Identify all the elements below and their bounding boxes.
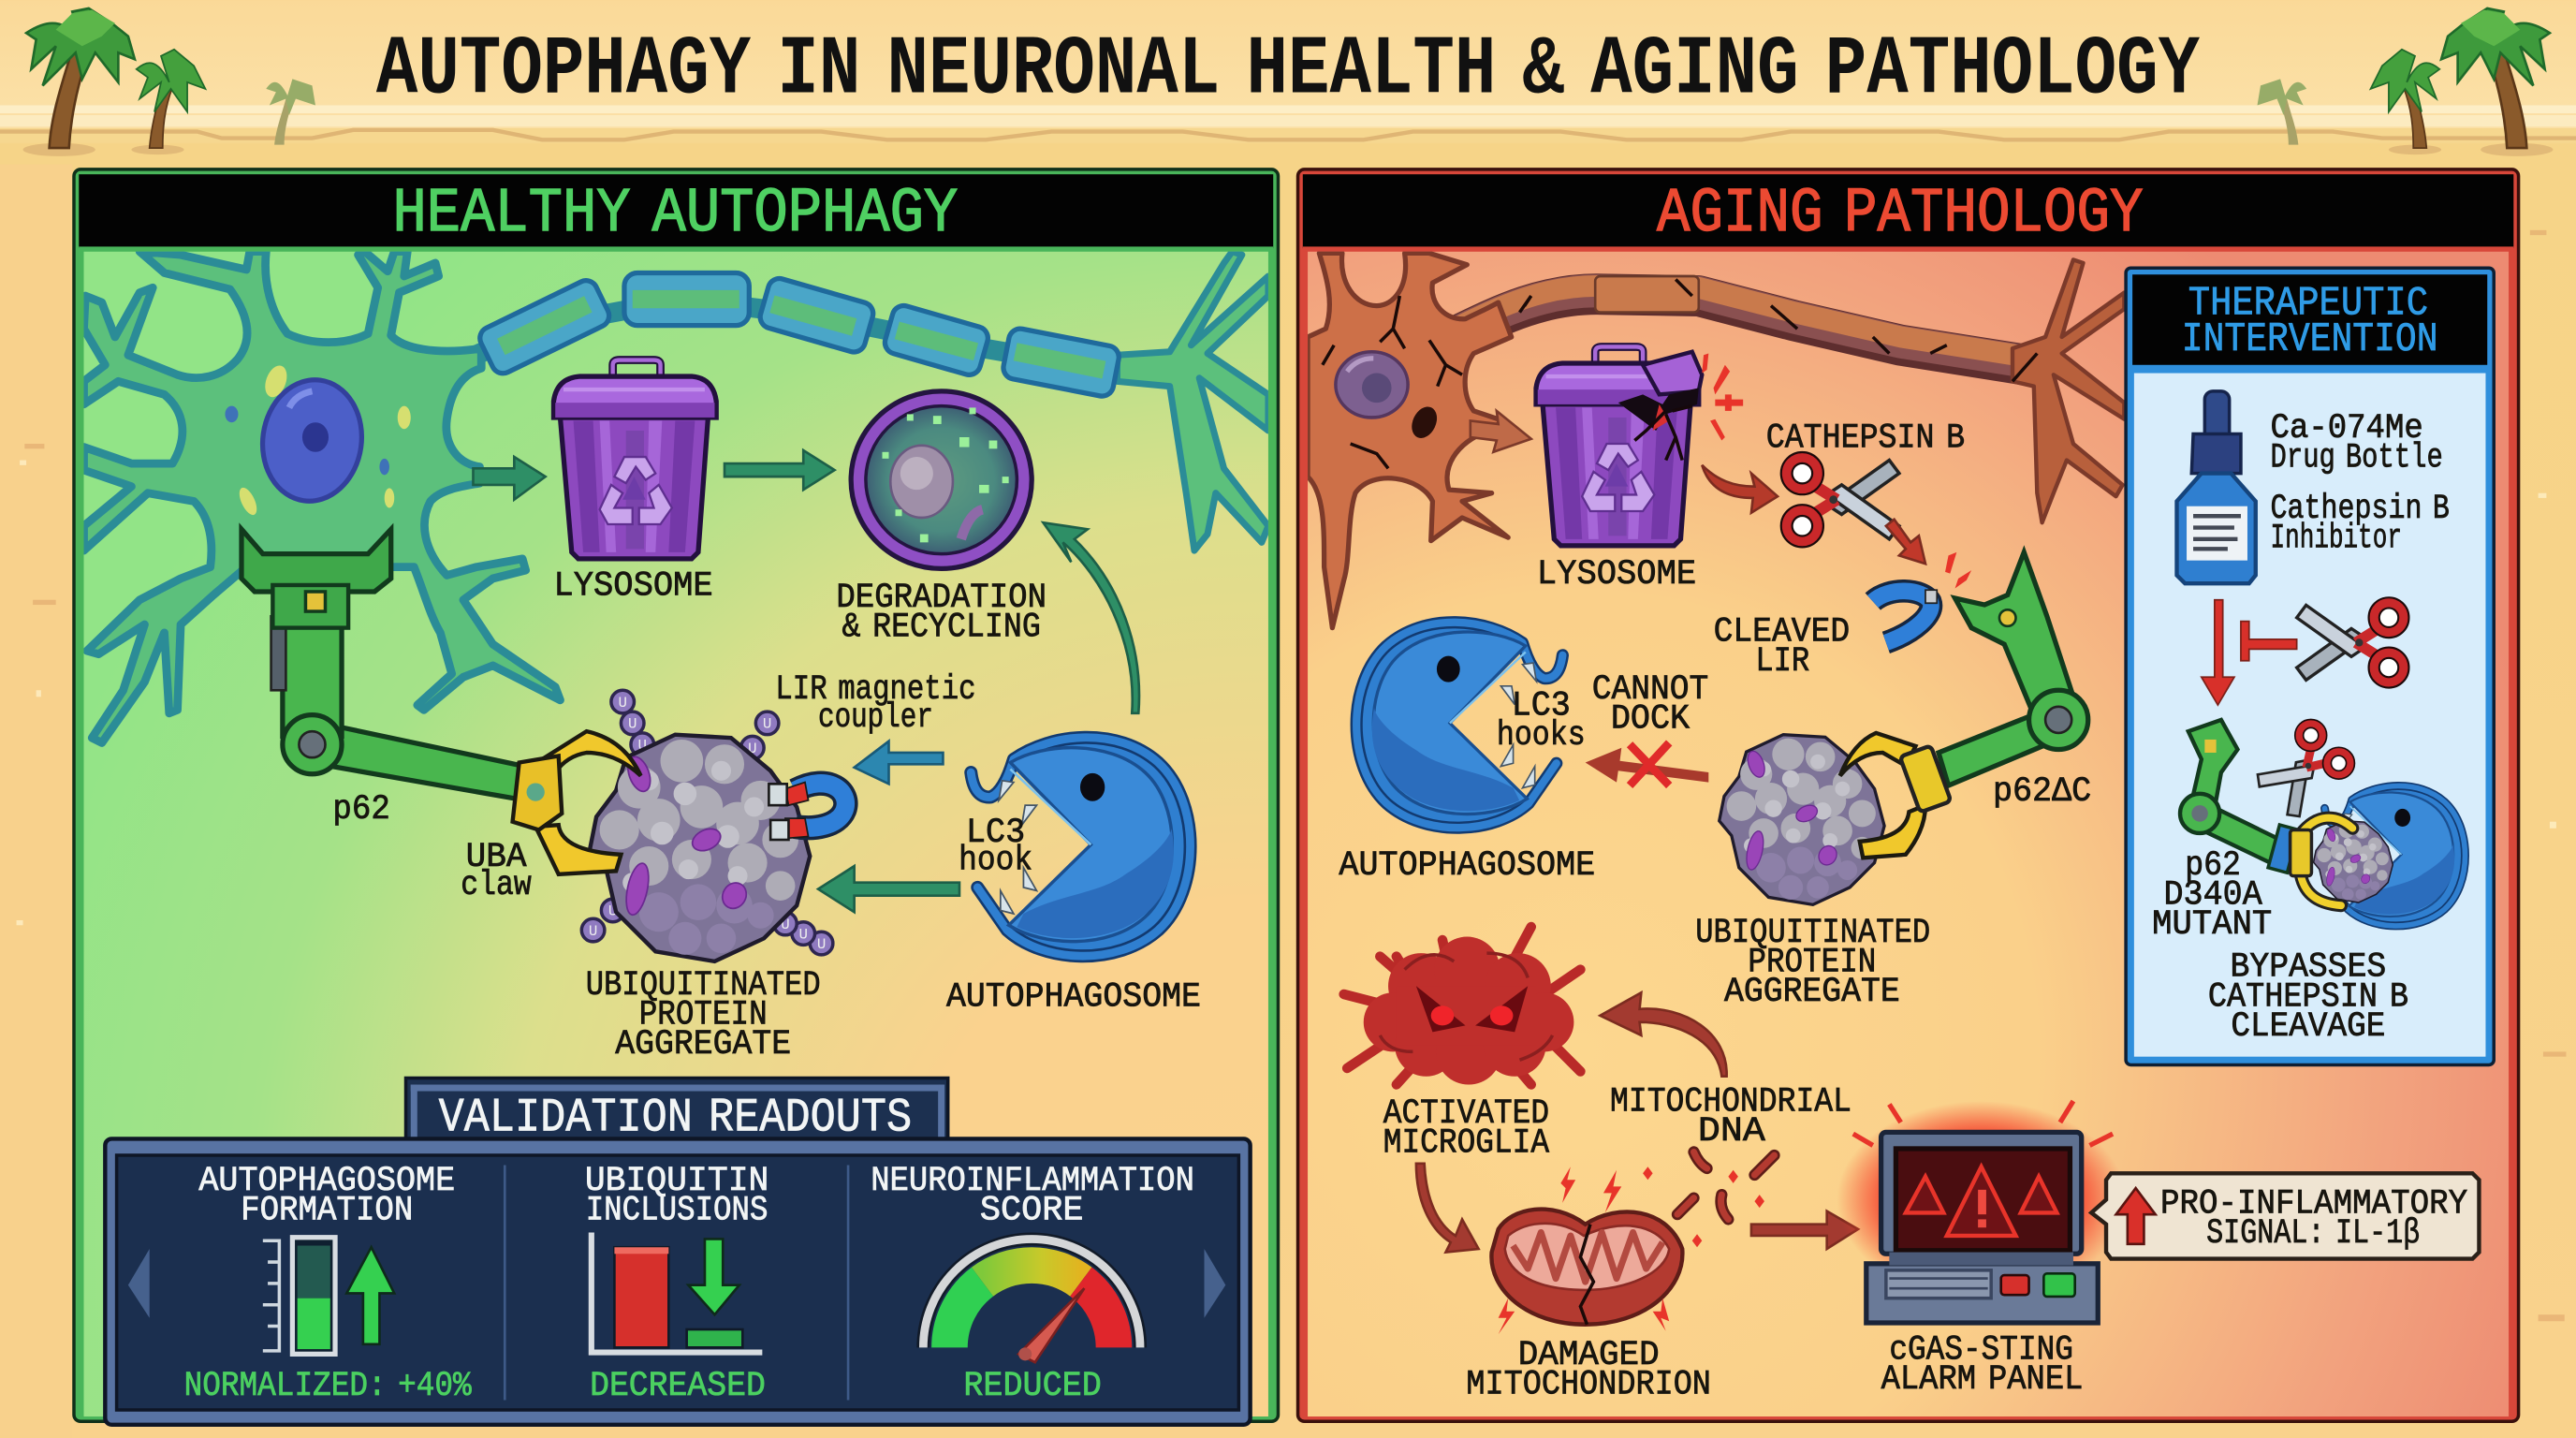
label: bypasses cathepsin B cleavage (2208, 948, 2408, 1047)
label: autophagosome: AUTOPHAGOSOME (946, 977, 1201, 1017)
label: mitochondrial DNA: MITOCHONDRIAL (1610, 1083, 1852, 1123)
label: cannot dock: DOCK (1611, 700, 1690, 740)
readout: autophagosome formation: AUTOPHAGOSOME (198, 1162, 455, 1201)
label: degradation and recycling: & RECYCLING (842, 608, 1041, 647)
panel header: healthy autophagy: HEALTHY AUTOPHAGY (392, 179, 958, 250)
label: cleaved LIR: LIR (1755, 642, 1809, 682)
label: degradation and recycling: DEGRADATION (836, 579, 1046, 618)
label: ubiquitinated protein aggregate: PROTEIN (639, 996, 768, 1035)
curved arrow: mtDNA to microglia (1600, 992, 1727, 1077)
readout: neuroinflammation score: NEUROINFLAMMATION (871, 1162, 1194, 1201)
curved arrow: autophagosome to degradation (1043, 522, 1139, 713)
soma and dendrites (1308, 253, 1512, 628)
degenerating neuron (1308, 253, 2124, 628)
label: ubiquitinated protein aggregate: UBIQUITINATED (1695, 914, 1930, 953)
nucleus (260, 377, 364, 504)
broken robotic arm p62 delta C (1939, 552, 2088, 785)
inhibited scissors (2297, 603, 2404, 682)
label: cGAS-STING alarm panel (1881, 1331, 2083, 1400)
arrow: scissors to p62 (1886, 520, 1925, 564)
pacman engulfing aggregate (2325, 785, 2465, 926)
red damage sparks (1702, 353, 1743, 441)
red down arrow (2202, 600, 2234, 705)
autophagosome pacman (971, 738, 1191, 956)
up arrow icon (2116, 1188, 2156, 1244)
label: bypasses cathepsin B cleavage: CATHEPSIN B (2208, 977, 2408, 1017)
readout: neuroinflammation score: SCORE (980, 1191, 1083, 1230)
label: LC3 hook (959, 814, 1032, 881)
panel background (1308, 252, 2509, 1416)
label: ubiquitinated protein aggregate: UBIQUITINATED (586, 966, 821, 1005)
validation tab: VALIDATION READOUTS (439, 1093, 912, 1146)
readout: autophagosome formation (184, 1162, 472, 1406)
label: UBA claw: UBA (466, 838, 527, 877)
callout: pro-inflammatory signal: SIGNAL: IL-1β (2206, 1214, 2420, 1254)
activated microglia (1344, 927, 1580, 1085)
label: LC3 hooks: hooks (1497, 716, 1586, 756)
gauge bar icon (263, 1238, 394, 1354)
readout: autophagosome formation: FORMATION (241, 1191, 413, 1230)
label: cathepsin B inhibitor: Inhibitor (2271, 520, 2402, 559)
readout: neuroinflammation score (871, 1162, 1194, 1406)
small scissors (2251, 719, 2355, 823)
label: cGAS-STING alarm panel: cGAS-STING (1889, 1331, 2073, 1371)
label: ubiquitinated protein aggregate (586, 966, 821, 1064)
label: damaged mitochondrion (1466, 1336, 1711, 1404)
inhibition bar (2241, 622, 2297, 661)
axon (1438, 286, 2026, 365)
degradation and recycling vesicle (851, 391, 1032, 568)
label: ubiquitinated protein aggregate: AGGREGATE (1724, 973, 1900, 1012)
lysosome trash can (553, 360, 716, 559)
label: LIR magnetic coupler: LIR magnetic (775, 670, 976, 710)
label: p62 D340A mutant: p62 (2185, 846, 2241, 886)
label: Ca-074Me drug bottle: Drug Bottle (2271, 439, 2443, 478)
label: p62 D340A mutant: D340A (2163, 875, 2263, 915)
ubiquitin chains (581, 690, 833, 955)
panel: healthy autophagy (74, 169, 1278, 1421)
myelin segments (476, 272, 1120, 398)
therapeutic header: THERAPEUTIC (2188, 280, 2428, 327)
axon terminal (1117, 252, 1268, 550)
autophagosome pacman, aging (1356, 623, 1562, 828)
label: LC3 hooks: LC3 (1512, 687, 1571, 726)
label: LC3 hook: LC3 (966, 814, 1025, 853)
arrow: mitochondrion to alarm (1751, 1211, 1858, 1249)
curved arrow: microglia to mitochondrion (1416, 1164, 1479, 1253)
label: p62 D340A mutant: MUTANT (2152, 905, 2272, 945)
arrow: lysosome to degradation (724, 450, 835, 490)
label: bypasses cathepsin B cleavage: BYPASSES (2231, 948, 2386, 988)
label: p62 D340A mutant (2152, 846, 2272, 945)
label: LIR magnetic coupler (775, 670, 976, 738)
readout: ubiquitin inclusions: INCLUSIONS (586, 1191, 768, 1230)
ubiquitinated protein aggregate (590, 735, 810, 961)
soma and dendrites (84, 252, 560, 742)
palm trees, left group (23, 8, 315, 156)
arrow: autophagosome to aggregate (818, 866, 959, 912)
arrow: LC3 to LIR (855, 741, 943, 784)
label: LIR magnetic coupler: coupler (818, 698, 933, 738)
label: activated microglia: MICROGLIA (1383, 1123, 1550, 1163)
label: UBA claw (461, 838, 532, 905)
label: lysosome: LYSOSOME (1537, 555, 1696, 594)
UBA claw in aging panel (1840, 733, 1951, 858)
label: cathepsin B inhibitor: Cathepsin B (2271, 490, 2450, 529)
cleaved LIR magnet (1873, 590, 1937, 642)
robotic arm p62 (242, 529, 522, 799)
cracked lysosome trash can (1536, 346, 1743, 546)
readout: autophagosome formation: NORMALIZED: +40% (184, 1367, 472, 1406)
readout frame (105, 1138, 1251, 1425)
speedometer gauge icon (923, 1239, 1140, 1362)
panel: validation readouts (105, 1078, 1251, 1425)
label: cathepsin B: CATHEPSIN B (1766, 419, 1965, 459)
readout: ubiquitin inclusions: DECREASED (590, 1367, 766, 1406)
label: mitochondrial DNA (1610, 1083, 1852, 1152)
title: AUTOPHAGY IN NEURONAL HEALTH & AGING PATHOLOGY (376, 22, 2200, 117)
panel: aging pathology (1298, 169, 2519, 1421)
label: activated microglia: ACTIVATED (1383, 1094, 1549, 1134)
label: bypasses cathepsin B cleavage: CLEAVAGE (2231, 1007, 2385, 1047)
label: Ca-074Me drug bottle (2271, 409, 2443, 478)
right chevron (1204, 1249, 1225, 1318)
label: cGAS-STING alarm panel: ALARM PANEL (1881, 1360, 2083, 1400)
label: LC3 hooks (1497, 687, 1586, 756)
D340A mutant arm (2180, 720, 2299, 873)
blocked arrow with red X (1586, 742, 1708, 785)
LIR magnet (768, 783, 845, 840)
label: ubiquitinated protein aggregate: AGGREGATE (615, 1025, 791, 1064)
aggregate being engulfed (2314, 821, 2393, 902)
axon terminal (2012, 259, 2124, 522)
callout: pro-inflammatory signal: PRO-INFLAMMATORY (2160, 1184, 2467, 1224)
necrotic spot (1412, 406, 1438, 438)
label: UBA claw: claw (461, 866, 532, 905)
scissors: cathepsin B (1787, 458, 1899, 541)
panel header: healthy autophagy (79, 174, 1273, 252)
damaged mitochondrion (1491, 1167, 1682, 1334)
UBA claw (513, 731, 640, 874)
label: ubiquitinated protein aggregate (1695, 914, 1930, 1012)
arrow: neuron to lysosome (473, 457, 546, 500)
readout: ubiquitin inclusions (585, 1162, 768, 1406)
curved arrow: to scissors (1702, 465, 1778, 513)
arrow: soma to lysosome (1471, 411, 1531, 452)
label: cleaved LIR: CLEAVED (1714, 613, 1850, 653)
label: damaged mitochondrion: MITOCHONDRION (1466, 1365, 1711, 1404)
label: autophagosome: AUTOPHAGOSOME (1339, 846, 1595, 886)
label: mitochondrial DNA: DNA (1698, 1112, 1766, 1152)
axon core (474, 298, 1005, 361)
label: degradation and recycling (836, 579, 1046, 647)
panel header: aging pathology (1303, 174, 2513, 252)
label: cathepsin B inhibitor (2271, 490, 2450, 559)
label: cannot dock (1592, 670, 1708, 740)
label: cannot dock: CANNOT (1592, 670, 1708, 710)
drug bottle (2177, 391, 2256, 583)
healthy neuron (84, 252, 1268, 742)
cGAS-STING alarm panel (1837, 1101, 2126, 1323)
panel background (84, 252, 1268, 1416)
label: LC3 hook: hook (959, 842, 1032, 881)
bar chart icon (592, 1232, 762, 1353)
therapeutic header: INTERVENTION (2182, 316, 2438, 363)
panel: therapeutic intervention (2126, 268, 2494, 1064)
label: Ca-074Me drug bottle: Ca-074Me (2271, 409, 2423, 448)
label: activated microglia (1383, 1094, 1550, 1163)
label: p62: p62 (332, 790, 390, 829)
label: p62 delta C: p62ΔC (1993, 772, 2091, 812)
label: cleaved LIR (1714, 613, 1850, 682)
callout: pro-inflammatory signal (2091, 1173, 2479, 1259)
therapeutic header (2132, 274, 2487, 365)
palm trees, right group (2258, 8, 2553, 156)
readout: ubiquitin inclusions: UBIQUITIN (585, 1162, 768, 1201)
label: damaged mitochondrion: DAMAGED (1518, 1336, 1660, 1375)
left chevron (128, 1249, 150, 1318)
yellow claw, mutant (2291, 818, 2352, 905)
readout: neuroinflammation score: REDUCED (963, 1367, 1102, 1406)
sparks at cleavage (1945, 552, 1971, 588)
panel header: aging pathology: AGING PATHOLOGY (1657, 179, 2144, 250)
mitochondrial DNA fragments (1643, 1152, 1775, 1247)
label: ubiquitinated protein aggregate: PROTEIN (1748, 943, 1876, 982)
label: lysosome: LYSOSOME (553, 566, 713, 606)
aggregate in aging panel (1720, 735, 1884, 904)
